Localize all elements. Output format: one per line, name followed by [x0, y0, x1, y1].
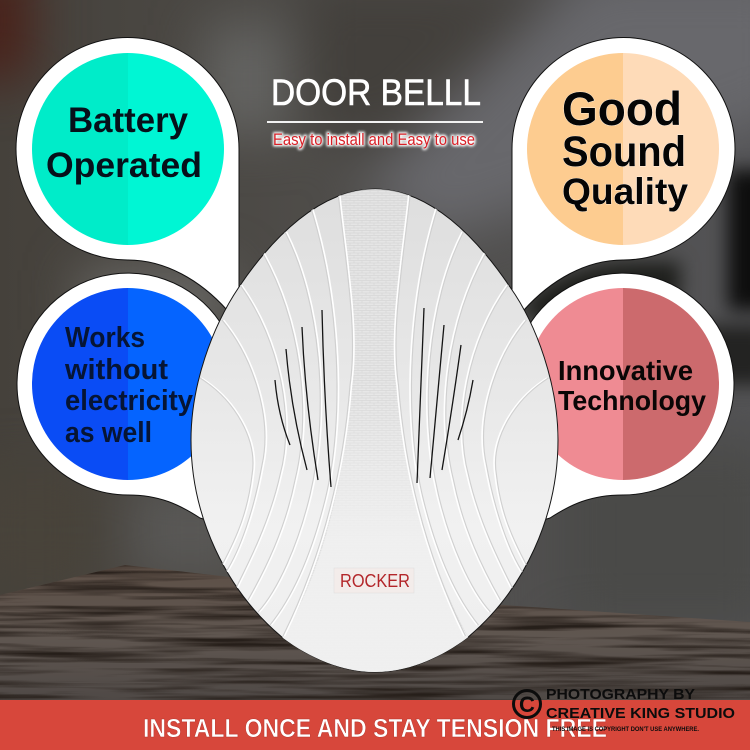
- credit text: [546, 686, 735, 733]
- textured centre strip: [282, 189, 468, 672]
- callout: battery operated: [16, 38, 239, 310]
- label: without: [64, 354, 168, 386]
- footer slogan: INSTALL ONCE AND STAY TENSION FREE: [143, 713, 607, 743]
- label: Good: [562, 82, 682, 135]
- copyright icon: [514, 690, 540, 718]
- label: Quality: [562, 171, 688, 212]
- right ridges: [396, 192, 548, 636]
- blue circle: [32, 288, 224, 480]
- credit text: PHOTOGRAPHY BY: [546, 686, 695, 703]
- callout: good sound quality: [512, 38, 735, 310]
- teal circle: [32, 53, 224, 245]
- credit text: CREATIVE KING STUDIO: [546, 705, 735, 722]
- credit text: THIS IMAGE IS COPYRIGHT DON'T USE ANYWHERE.: [552, 726, 699, 733]
- callout bubble: [510, 273, 734, 530]
- subtitle: Easy to install and Easy to use: [273, 131, 475, 149]
- callout bubble: [17, 273, 240, 530]
- label: Operated: [46, 146, 202, 185]
- sound slits left: [275, 310, 331, 487]
- label: [562, 82, 688, 212]
- title: [267, 72, 483, 149]
- label: [558, 355, 706, 416]
- left ridges: [200, 192, 353, 636]
- label: [46, 101, 202, 185]
- label: Battery: [68, 101, 189, 140]
- heading: DOOR BELLL: [271, 72, 481, 113]
- peach circle: [527, 53, 719, 245]
- doorbell product: [191, 185, 558, 680]
- pink circle: [527, 288, 719, 480]
- label: Works: [65, 322, 145, 354]
- label: Innovative: [558, 355, 693, 386]
- callout: innovative technology: [510, 273, 734, 530]
- label: Technology: [558, 385, 706, 416]
- label: Sound: [562, 128, 686, 176]
- copyright icon: C: [519, 692, 535, 717]
- wooden table: [0, 560, 750, 705]
- brand badge: ROCKER: [340, 571, 410, 591]
- label: [64, 322, 193, 449]
- left ridges highlight: [202, 192, 354, 636]
- sound slits right: [417, 308, 473, 483]
- right ridges highlight: [394, 192, 547, 636]
- rule: [267, 121, 483, 123]
- callout bubble: [512, 38, 735, 310]
- callout bubble: [16, 38, 239, 310]
- callout: works without electricity: [17, 273, 240, 530]
- label: electricity: [65, 385, 193, 417]
- lower centre surface: [282, 456, 468, 672]
- subtitle: Easy to install and Easy to use: [273, 131, 475, 149]
- doorbell body: [191, 189, 558, 672]
- label: as well: [65, 417, 152, 449]
- footer band: [0, 700, 750, 750]
- photographer watermark: [514, 686, 735, 733]
